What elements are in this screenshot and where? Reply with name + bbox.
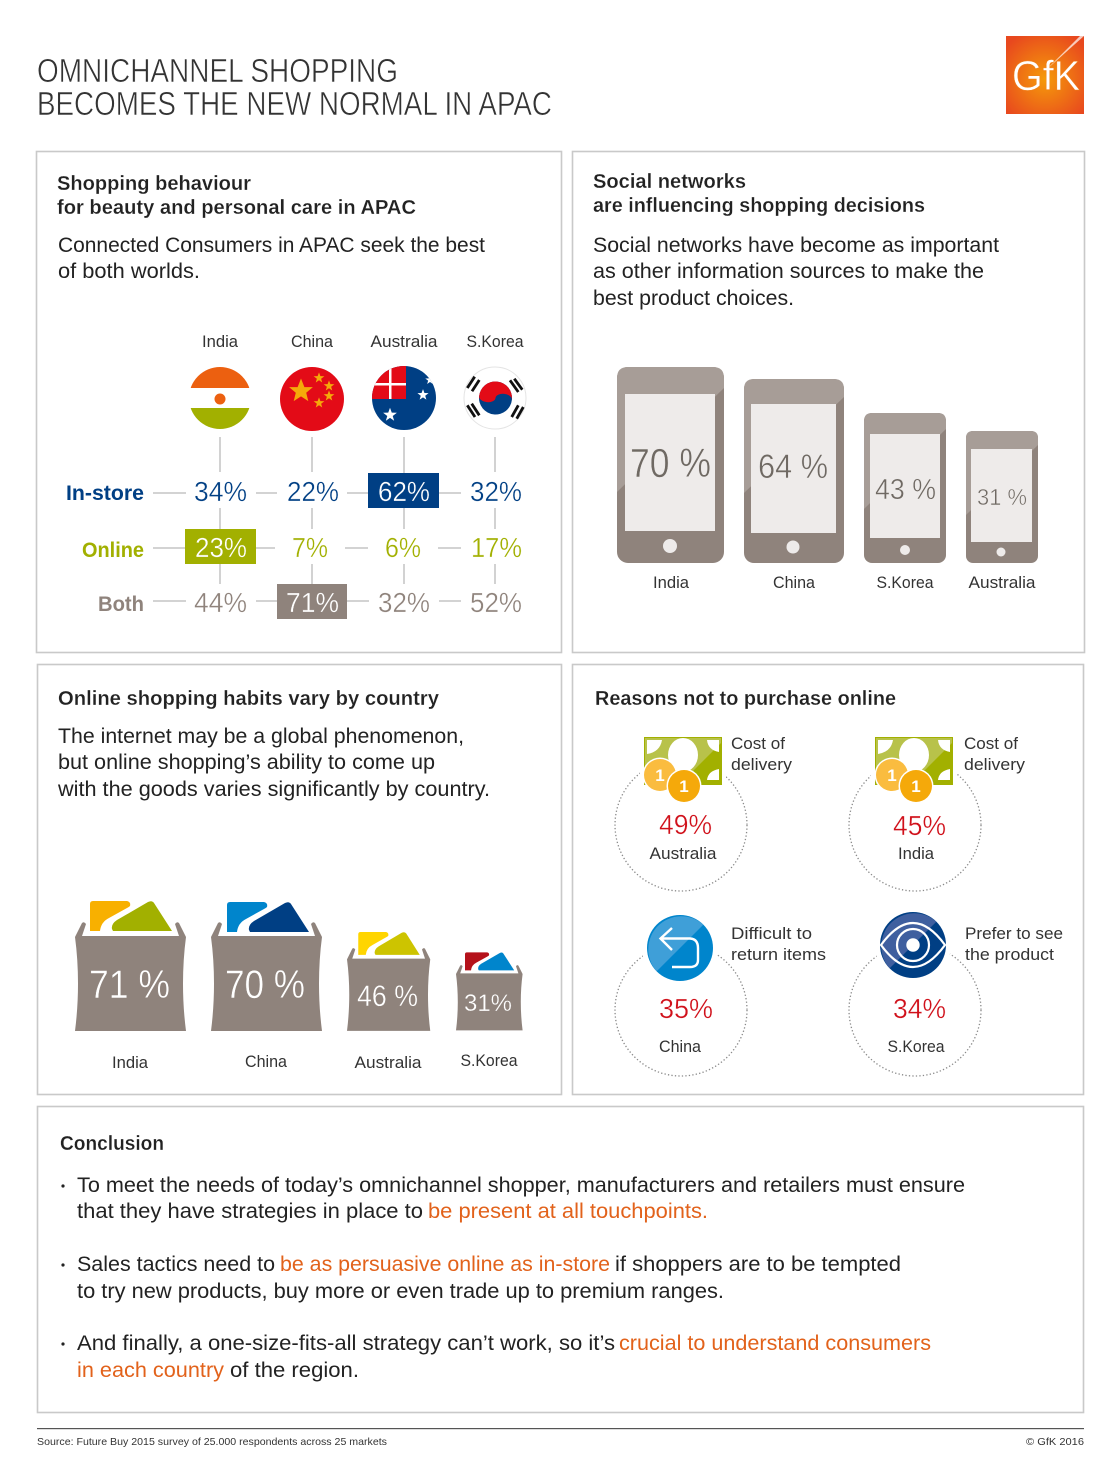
bag: China 70%: China <box>245 1052 288 1071</box>
bullet 3 <box>61 1332 931 1382</box>
reason: difficult to return items, China 35%: Difficult to <box>731 924 812 943</box>
text: online shopping body <box>57 725 490 801</box>
bag: S.Korea 31% <box>456 952 523 1070</box>
heading: online shopping habits: Online shopping habits vary by country <box>58 687 440 710</box>
title: BECOMES THE NEW NORMAL IN APAC <box>37 85 552 122</box>
phone: S.Korea 43%: S.Korea <box>876 573 934 592</box>
text: online shopping body: with the goods varies significantly by country. <box>57 778 490 801</box>
reason: cost of delivery, Australia 49%: 1 <box>655 766 665 785</box>
logo: GfK <box>1006 36 1084 114</box>
reason: prefer to see the product, S.Korea 34%: Prefer to see <box>965 924 1063 943</box>
bullet 3: crucial to understand consumers <box>619 1332 931 1355</box>
title <box>37 52 552 122</box>
bullet 1: To meet the needs of today’s omnichannel shopper, manufacturers and retailers must ensure <box>77 1174 965 1197</box>
bullet 2 <box>61 1253 901 1303</box>
matrix row: in-store: 62% <box>378 476 430 507</box>
icon: India flag <box>189 367 251 430</box>
matrix row: online: Online <box>82 539 144 562</box>
text: social networks body <box>593 234 999 310</box>
bullet 1 <box>61 1174 965 1223</box>
reason: cost of delivery, Australia 49%: Australia <box>650 844 717 863</box>
heading: shopping behaviour: for beauty and personal care in APAC <box>57 196 416 219</box>
heading: conclusion: Conclusion <box>60 1132 164 1155</box>
reason: difficult to return items, China 35%: China <box>659 1037 702 1056</box>
matrix row: both <box>98 584 522 619</box>
bag: India 71%: India <box>112 1053 149 1072</box>
panel: reasons not to purchase online <box>572 664 1084 1094</box>
bag: S.Korea 31%: S.Korea <box>460 1051 518 1070</box>
reason: cost of delivery, Australia 49%: 1 <box>679 777 689 796</box>
phone: S.Korea 43%: 43 % <box>875 474 936 506</box>
reason: prefer to see the product, S.Korea 34%: S.Korea <box>888 1037 945 1056</box>
bag: China 70%: 70 % <box>225 963 305 1007</box>
matrix row: online: 17% <box>471 532 522 563</box>
panel: conclusion <box>38 1106 1084 1412</box>
panel: online shopping habits <box>38 664 562 1094</box>
reason: prefer to see the product, S.Korea 34% <box>849 907 1063 1076</box>
heading: social networks <box>593 170 925 217</box>
bullet 3: And finally, a one-size-fits-all strategy can’t work, so it’s <box>77 1332 615 1355</box>
heading: reasons: Reasons not to purchase online <box>595 687 896 710</box>
matrix row: in-store <box>66 473 522 508</box>
bullet 2: to try new products, buy more or even trade up to premium ranges. <box>77 1280 724 1303</box>
phone: China 64%: China <box>773 573 816 592</box>
reason: difficult to return items, China 35%: return items <box>731 945 826 964</box>
footer <box>37 1428 1084 1448</box>
reason: cost of delivery, India 45%: delivery <box>964 755 1026 774</box>
matrix row: both: Both <box>98 593 144 616</box>
phone: China 64%: 64 % <box>758 448 828 486</box>
text: connected consumers: Connected Consumers in APAC seek the best <box>58 234 485 257</box>
reason: cost of delivery, Australia 49%: 49% <box>659 809 712 840</box>
text: online shopping body: but online shopping’s ability to come up <box>58 751 435 774</box>
country labels <box>202 332 524 351</box>
bag: Australia 46% <box>347 932 430 1072</box>
phone: India 70%: India <box>653 573 690 592</box>
phone: China 64% <box>744 379 844 592</box>
reason: cost of delivery, India 45%: 1 <box>911 777 921 796</box>
reason: prefer to see the product, S.Korea 34%: the product <box>965 945 1054 964</box>
bullet 3: of the region. <box>230 1359 359 1382</box>
reason: difficult to return items, China 35%: 35% <box>659 993 713 1024</box>
text: connected consumers: of both worlds. <box>58 260 200 283</box>
bullet 1: be present at all touchpoints. <box>428 1200 708 1223</box>
phone: India 70%: 70 % <box>630 440 711 486</box>
panel: shopping behaviour <box>36 152 562 652</box>
reason: cost of delivery, India 45%: 1 <box>887 766 897 785</box>
reason: difficult to return items, China 35% <box>615 910 826 1076</box>
reason: cost of delivery, Australia 49%: delivery <box>731 755 793 774</box>
matrix row: online <box>82 529 522 564</box>
matrix row: both: 32% <box>378 587 430 618</box>
reason: cost of delivery, India 45%: 45% <box>893 810 946 841</box>
heading: social networks: Social networks <box>593 170 746 193</box>
panel: social networks <box>572 152 1084 652</box>
bag: S.Korea 31%: 31% <box>464 990 512 1017</box>
text: connected consumers <box>58 234 485 283</box>
phone: India 70% <box>617 367 724 592</box>
matrix row: online: 23% <box>195 532 247 563</box>
matrix row: both: 71% <box>286 587 339 618</box>
matrix row: in-store: 22% <box>287 476 339 507</box>
reason: cost of delivery, India 45%: India <box>898 844 935 863</box>
matrix row: online: 7% <box>292 532 328 563</box>
matrix row: online: 6% <box>385 532 421 563</box>
country labels: S.Korea <box>466 332 524 351</box>
heading: shopping behaviour: Shopping behaviour <box>57 172 251 195</box>
heading: shopping behaviour <box>57 172 416 219</box>
matrix row: both: 52% <box>470 587 522 618</box>
bullet 3: in each country <box>77 1359 225 1382</box>
bullet 2: Sales tactics need to <box>77 1253 275 1276</box>
bullet 1: that they have strategies in place to <box>77 1200 423 1223</box>
bag: China 70% <box>211 902 322 1071</box>
bag: Australia 46%: 46 % <box>357 980 418 1013</box>
icon: South Korea flag <box>464 367 526 429</box>
bag: Australia 46%: Australia <box>354 1053 422 1072</box>
matrix lines <box>153 437 495 601</box>
bag: India 71%: 71 % <box>89 963 170 1007</box>
text: social networks body: as other information sources to make the <box>593 260 984 283</box>
matrix row: both: 44% <box>194 587 247 618</box>
phone: S.Korea 43% <box>864 413 946 592</box>
bullet 2: be as persuasive online as in-store <box>280 1253 610 1276</box>
text: online shopping body: The internet may be a global phenomenon, <box>58 725 464 748</box>
reason: cost of delivery, Australia 49%: Cost of <box>731 734 785 753</box>
matrix row: in-store: 34% <box>194 476 247 507</box>
bullet 2: if shoppers are to be tempted <box>615 1253 901 1276</box>
footer: Source: Future Buy 2015 survey of 25.000 respondents across 25 markets <box>37 1436 387 1448</box>
country labels: Australia <box>370 332 438 351</box>
icon: China flag <box>280 367 344 431</box>
text: social networks body: Social networks have become as important <box>593 234 999 257</box>
heading: social networks: are influencing shopping decisions <box>593 194 925 217</box>
reason: cost of delivery, Australia 49% <box>615 732 793 891</box>
footer: © GfK 2016 <box>1026 1436 1084 1448</box>
bag: India 71% <box>75 901 186 1072</box>
phone: Australia 31% <box>966 431 1038 592</box>
phone: Australia 31%: Australia <box>968 573 1036 592</box>
logo: GfK: GfK <box>1012 52 1080 99</box>
title: OMNICHANNEL SHOPPING <box>37 52 398 89</box>
country labels: China <box>291 332 334 351</box>
phone: Australia 31%: 31 % <box>977 484 1027 510</box>
country labels: India <box>202 332 239 351</box>
reason: prefer to see the product, S.Korea 34%: 34% <box>893 993 946 1024</box>
reason: cost of delivery, India 45%: Cost of <box>964 734 1018 753</box>
text: social networks body: best product choices. <box>593 287 794 310</box>
matrix row: in-store: In-store <box>66 482 144 505</box>
icon: Australia flag <box>372 366 436 430</box>
matrix row: in-store: 32% <box>470 476 522 507</box>
reason: cost of delivery, India 45% <box>849 732 1026 891</box>
